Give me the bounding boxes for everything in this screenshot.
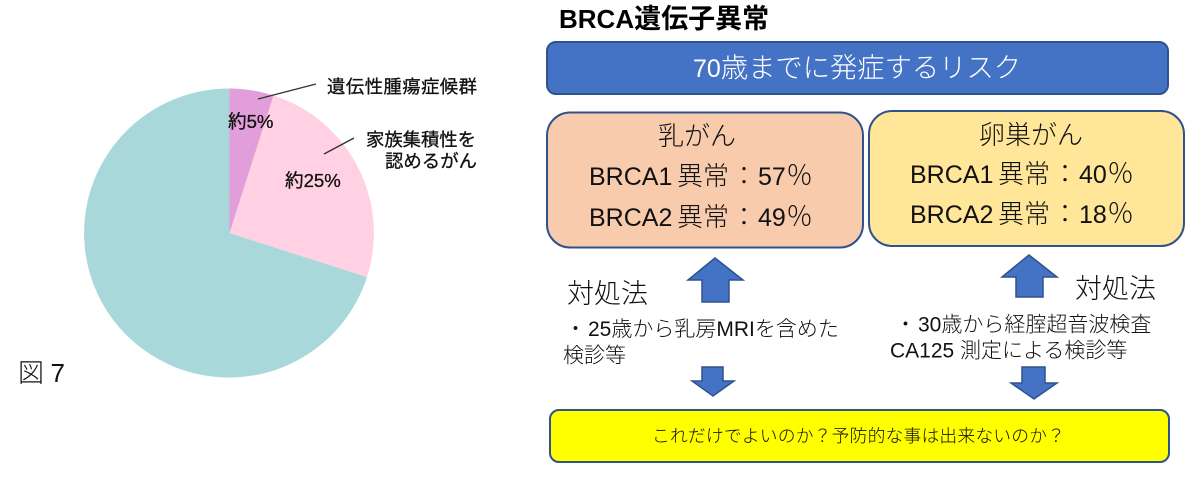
stat: BRCA2 ovarian: 異常 (998, 199, 1050, 229)
stat: BRCA2 breast: ％ (786, 202, 813, 232)
arrow: up right (1002, 255, 1057, 297)
text block: ovarian screening: ・ (895, 314, 916, 336)
label: about 5%: 約5% (228, 111, 273, 132)
arrow: up left (688, 258, 743, 302)
stat: BRCA2 ovarian: ： (1052, 199, 1078, 229)
stat: BRCA1 ovarian: 40 (1079, 161, 1107, 189)
text block: breast screening: ・ (565, 318, 586, 341)
stat: BRCA1 breast: BRCA1 (589, 163, 672, 191)
stat: BRCA2 breast: BRCA2 (589, 204, 672, 232)
text block: ovarian screening (890, 314, 1151, 362)
header bar: risk by age 70 (547, 42, 1168, 94)
panel: pie chart of hereditary cancer share (84, 76, 477, 377)
arrow: down right (1011, 367, 1057, 399)
panel: ovarian cancer (869, 111, 1184, 246)
callout: can anything be done to prevent it: これだけでよいのか？予防的な事は出来ないのか？ (652, 426, 1065, 446)
leader line: hereditary tumor syndrome (258, 84, 316, 99)
header bar: risk by age 70: 70歳までに発症するリスク (693, 52, 1021, 83)
pie slice: familial cancer about 25% (230, 96, 374, 277)
label: familial cancer (366, 129, 477, 172)
stat: BRCA1 breast: 57 (758, 163, 786, 191)
pie slice: remainder (84, 88, 367, 377)
stat: BRCA1 ovarian: 異常 (998, 159, 1050, 189)
leader line: familial cancer (324, 138, 354, 154)
stat: BRCA1 ovarian: ： (1052, 159, 1078, 189)
text block: breast screening: 検診等 (563, 344, 626, 368)
stat: BRCA2 ovarian: 18 (1079, 201, 1107, 229)
stat: BRCA1 breast: 異常 (677, 161, 729, 191)
figure label: 図 7 (18, 358, 65, 388)
heading: countermeasures left: 対処法 (567, 279, 648, 309)
pie slice: hereditary tumor syndrome about 5% (230, 88, 274, 233)
label: familial cancer: 認めるがん (385, 150, 477, 172)
stat: BRCA1 ovarian: ％ (1107, 159, 1134, 189)
stat: BRCA1 ovarian: BRCA1 (910, 161, 993, 189)
heading: ovarian cancer: 卵巣がん (979, 120, 1083, 150)
stat: BRCA2 ovarian: BRCA2 (910, 201, 993, 229)
stat: BRCA2 breast: ： (731, 202, 757, 232)
title: BRCA遺伝子異常 (559, 4, 769, 34)
label: familial cancer: 家族集積性を (366, 129, 476, 150)
stat: BRCA1 breast: ％ (786, 161, 813, 191)
text block: ovarian screening: 30歳から経腟超音波検査 (918, 314, 1151, 336)
panel: breast cancer (547, 112, 863, 248)
arrow: down left (692, 367, 734, 396)
stat: BRCA2 breast: 異常 (677, 202, 729, 232)
heading: breast cancer: 乳がん (658, 121, 736, 151)
stat: BRCA2 ovarian: ％ (1107, 199, 1134, 229)
text block: breast screening: 25歳から乳房MRIを含めた (588, 318, 839, 341)
callout: can anything be done to prevent it (550, 410, 1169, 462)
stat: BRCA2 breast: 49 (758, 204, 786, 232)
text block: ovarian screening: CA125 測定による検診等 (890, 340, 1127, 362)
label: hereditary tumor syndrome: 遺伝性腫瘍症候群 (327, 76, 477, 97)
stat: BRCA1 breast: ： (731, 161, 757, 191)
label: about 25%: 約25% (285, 170, 341, 191)
heading: countermeasures right: 対処法 (1075, 274, 1156, 304)
text block: breast screening (563, 318, 839, 368)
